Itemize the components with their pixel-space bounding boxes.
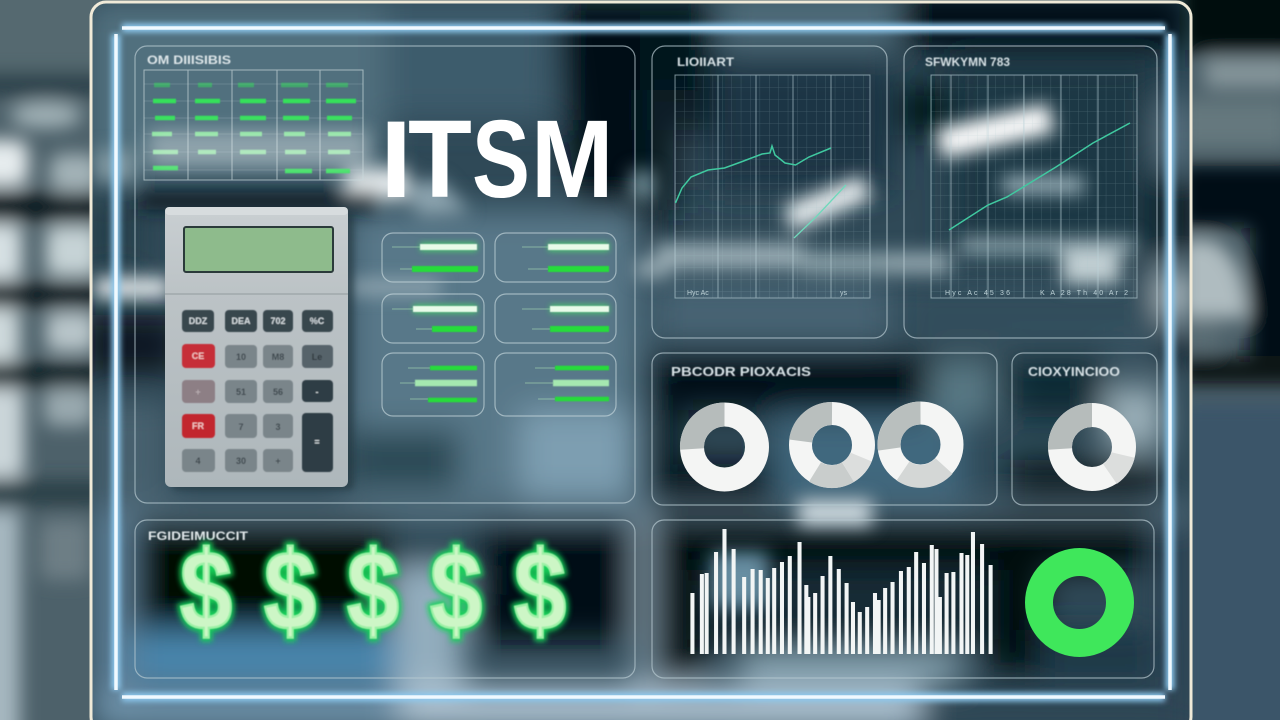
- dollar signs: $: [347, 527, 399, 653]
- bar chart: [692, 529, 991, 654]
- grid and line chart right: [931, 75, 1137, 298]
- calculator keys: 10: [236, 352, 246, 362]
- dollar glow: $: [514, 527, 566, 653]
- donut 3: [889, 413, 952, 476]
- grid and line chart left: ys: [840, 290, 848, 297]
- donut 4: [1060, 415, 1124, 479]
- grid and line chart right: K A 28 Th 40 Ar 2: [1040, 290, 1128, 297]
- heading: ledger: OM DIIISIBIS: [147, 53, 231, 67]
- calculator keys: -: [316, 387, 318, 397]
- calculator keys: 56: [273, 387, 283, 397]
- calculator keys: 30: [236, 456, 246, 466]
- panel: ledger and calculator: [135, 46, 635, 503]
- dollar glow: $: [264, 527, 316, 653]
- panel: single donut: [1012, 353, 1157, 505]
- dollar glow: $: [347, 527, 399, 653]
- dollar signs: [180, 527, 566, 653]
- title: ITSM: M: [531, 98, 613, 221]
- dollar glow: [180, 527, 566, 653]
- calculator keys: FR: [192, 421, 204, 431]
- calculator keys: 702: [270, 316, 286, 326]
- calculator display: [184, 227, 333, 272]
- title: ITSM: I: [380, 98, 412, 220]
- heading: single donut: CIOXYINCIOO: [1028, 364, 1120, 379]
- title: ITSM: S: [472, 98, 530, 221]
- calculator keys: DEA: [231, 316, 251, 326]
- table of green cells: [144, 70, 370, 180]
- heading: line chart left: LIOIIART: [677, 55, 735, 69]
- dollar signs: $: [430, 527, 482, 653]
- grid and line chart left: Hyc Ac: [687, 290, 709, 297]
- calculator keys: +: [275, 456, 281, 466]
- calculator keys: [182, 310, 333, 472]
- calculator: [165, 207, 354, 490]
- calculator keys: +: [195, 387, 201, 397]
- panel: line chart right: [904, 46, 1157, 338]
- calculator keys: =: [314, 437, 320, 447]
- panel: dollar signs: [135, 520, 635, 678]
- heading: dollars: FGIDEIMUCCIT: [148, 529, 249, 543]
- donut 1: [692, 414, 757, 480]
- title: ITSM: [380, 98, 613, 221]
- calculator keys: %C: [310, 316, 325, 326]
- green ring: [1039, 562, 1120, 643]
- calculator keys: CE: [192, 351, 204, 361]
- heading: donuts: PBCODR PIOXACIS: [671, 364, 811, 379]
- title: ITSM: T: [408, 98, 472, 221]
- panel: bar chart and green ring: [652, 520, 1154, 678]
- dollar signs: $: [514, 527, 566, 653]
- calculator keys: M8: [272, 352, 284, 362]
- dollar glow: $: [430, 527, 482, 653]
- heading: line chart right: SFWKYMN 783: [925, 55, 1010, 69]
- grid and line chart right: Hyc Ac 45 36: [945, 290, 1010, 297]
- calculator keys: 3: [275, 422, 281, 432]
- grid and line chart left: [675, 75, 870, 298]
- dollar glow: $: [180, 527, 232, 653]
- panel: line chart left: [652, 46, 887, 338]
- calculator keys: DDZ: [189, 316, 208, 326]
- donut 2: [800, 413, 864, 477]
- calculator keys: 51: [236, 387, 246, 397]
- metric cards: [382, 233, 616, 416]
- panel: donut charts: [652, 353, 997, 505]
- calculator keys: 7: [238, 422, 244, 432]
- calculator keys: 4: [195, 456, 201, 466]
- dollar signs: $: [180, 527, 232, 653]
- dollar signs: $: [264, 527, 316, 653]
- calculator keys: Le: [312, 352, 322, 362]
